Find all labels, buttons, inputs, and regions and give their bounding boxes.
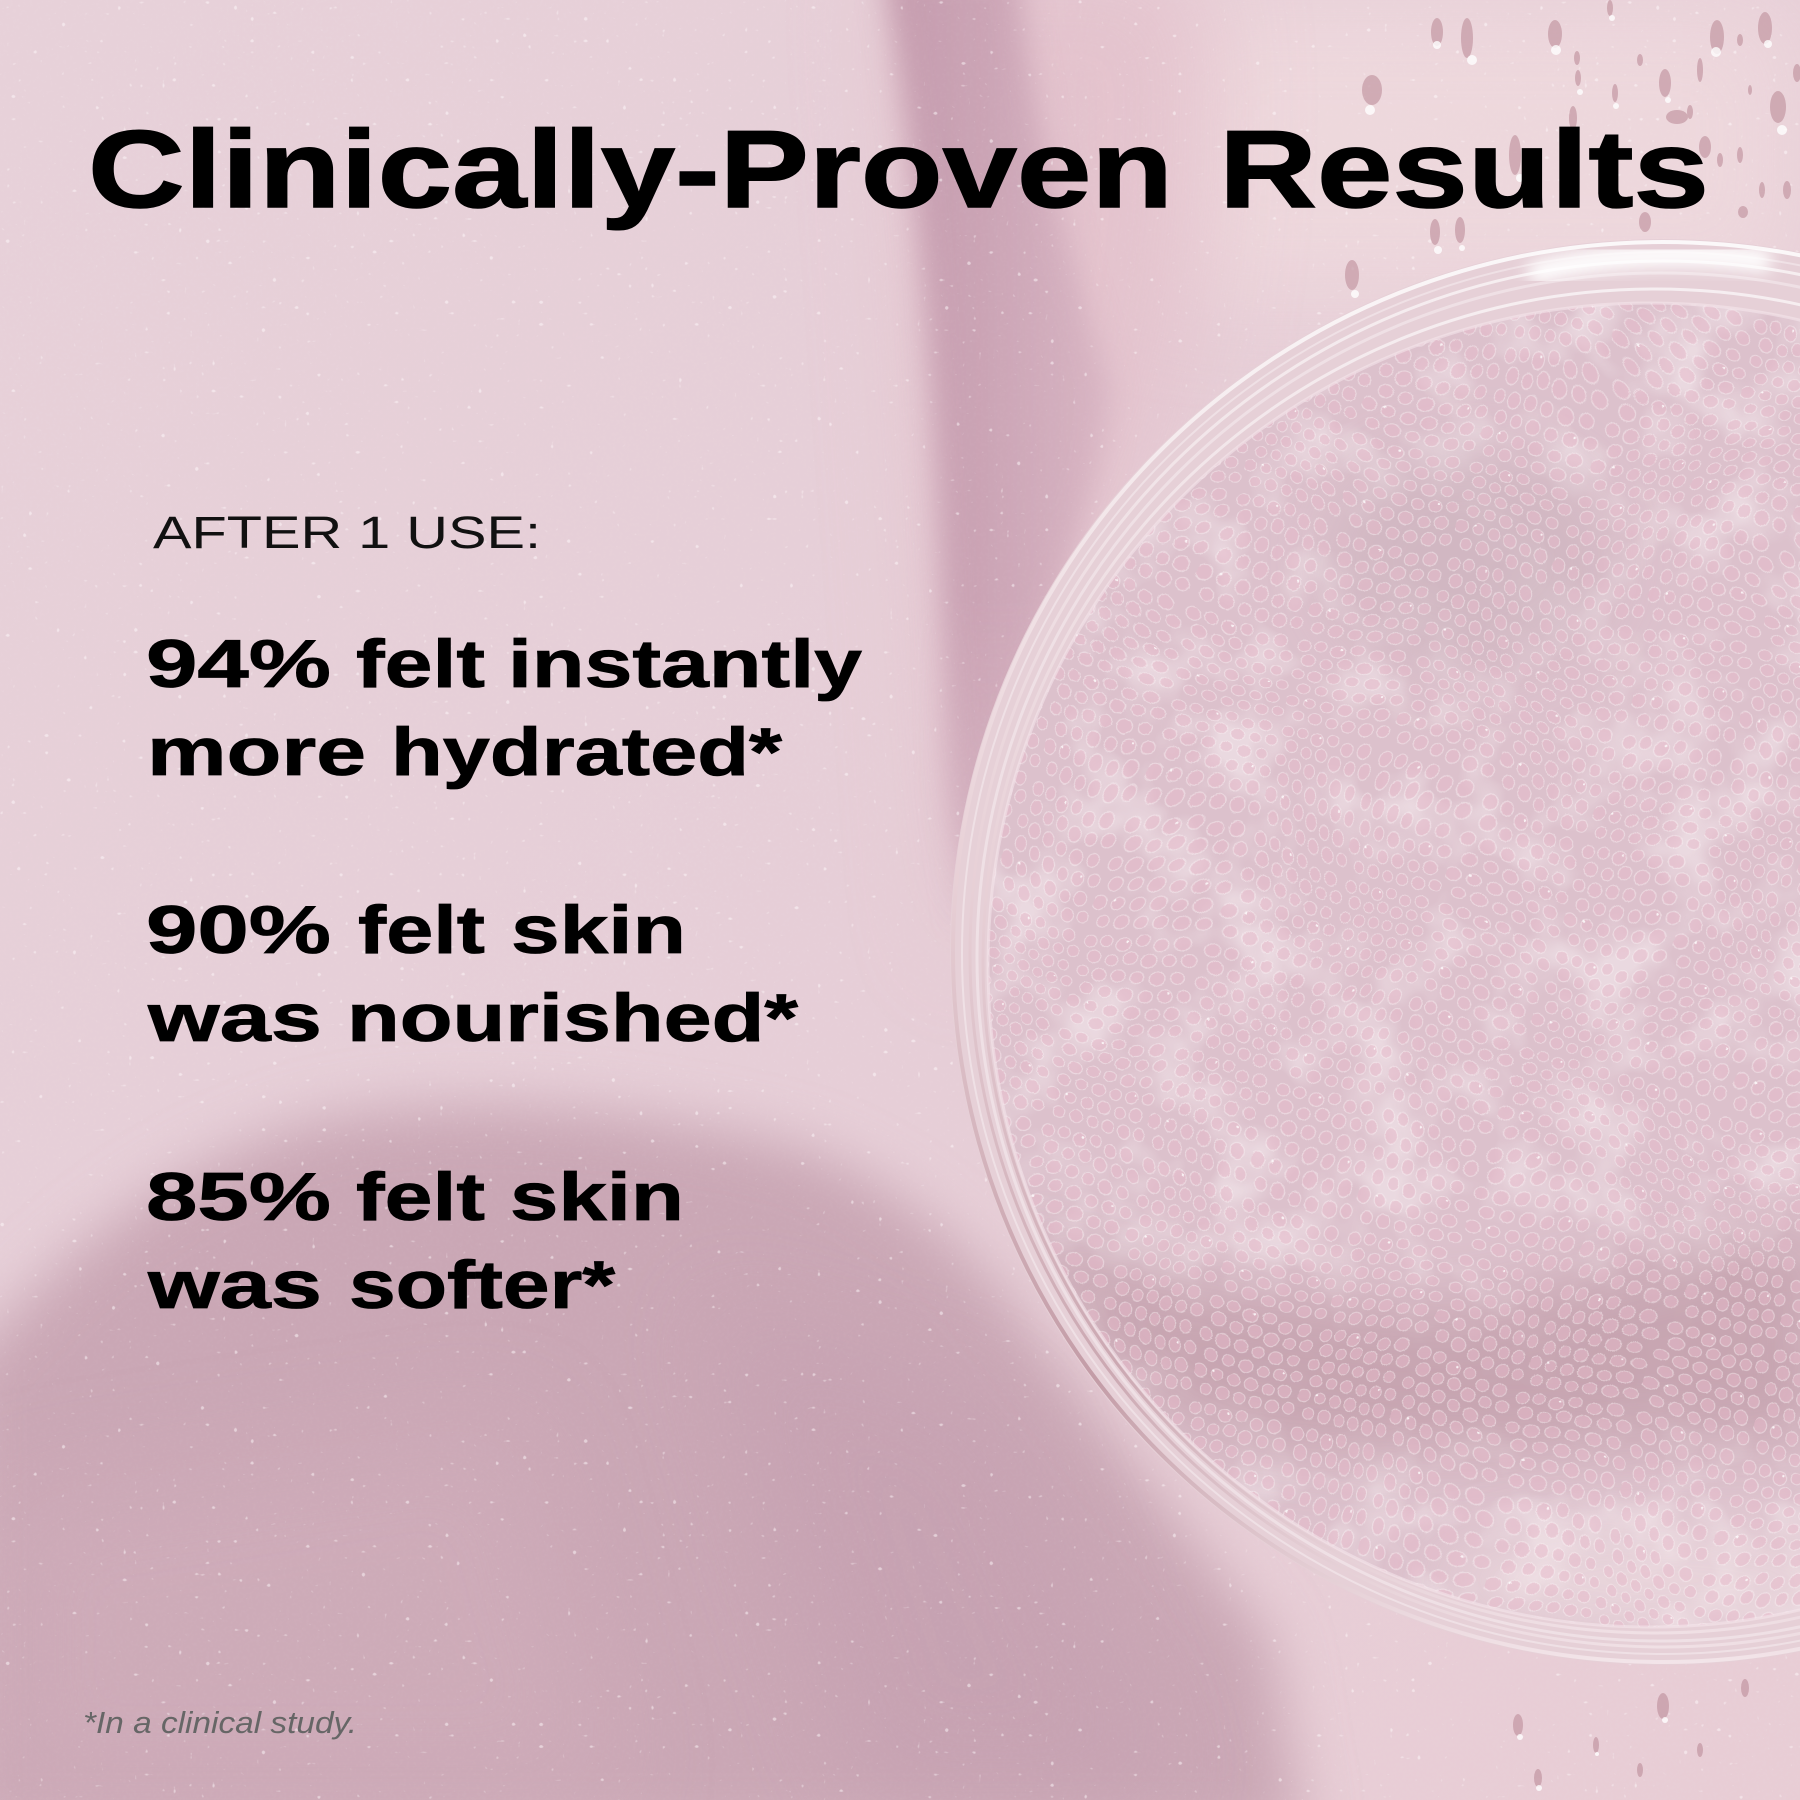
stat: 94% hydrated: hydrated* (391, 714, 783, 790)
water droplets: top right (1345, 0, 1800, 298)
stat: 90% nourished: was (147, 980, 322, 1056)
stat: 94% hydrated: more (147, 714, 366, 790)
stat: 85% softer (146, 1159, 684, 1323)
footnote: *In a clinical study. (83, 1705, 357, 1740)
stat: 94% hydrated: 94% (146, 626, 331, 702)
petri dish with pink beads (951, 240, 1800, 1664)
dish: interior tones (990, 304, 1800, 1625)
subheading: after 1 use: AFTER 1 USE: (153, 507, 541, 558)
title: Results (1219, 108, 1709, 231)
stat: 85% softer: softer* (349, 1247, 616, 1323)
dish: beads (988, 303, 1800, 1627)
stat: 90% nourished: nourished* (347, 980, 799, 1056)
shadow: vertical band at top centre (882, 0, 1208, 960)
stat: 85% softer: 85% (146, 1159, 331, 1235)
shadow: large lower-left shape (0, 1106, 1305, 1800)
stat: 85% softer: skin (510, 1159, 684, 1235)
stat: 85% softer: was (147, 1247, 322, 1323)
stat: 85% softer: felt (356, 1159, 485, 1235)
stat: 94% hydrated (146, 626, 862, 790)
water droplets: bottom right (1513, 1679, 1749, 1791)
dish: highlight at top of rim (1530, 256, 1770, 275)
stat: 90% nourished: 90% (146, 892, 331, 968)
dish: glass rim rings (953, 242, 1800, 1662)
title: Clinically-Proven (88, 108, 1173, 231)
stat: 94% hydrated: felt (356, 626, 485, 702)
stat: 90% nourished: felt (358, 892, 485, 968)
stat: 90% nourished: skin (511, 892, 686, 968)
dish: glass base (950, 239, 1800, 1665)
stat: 94% hydrated: instantly (508, 626, 862, 702)
title (88, 108, 1709, 231)
stat: 90% nourished (146, 892, 799, 1056)
